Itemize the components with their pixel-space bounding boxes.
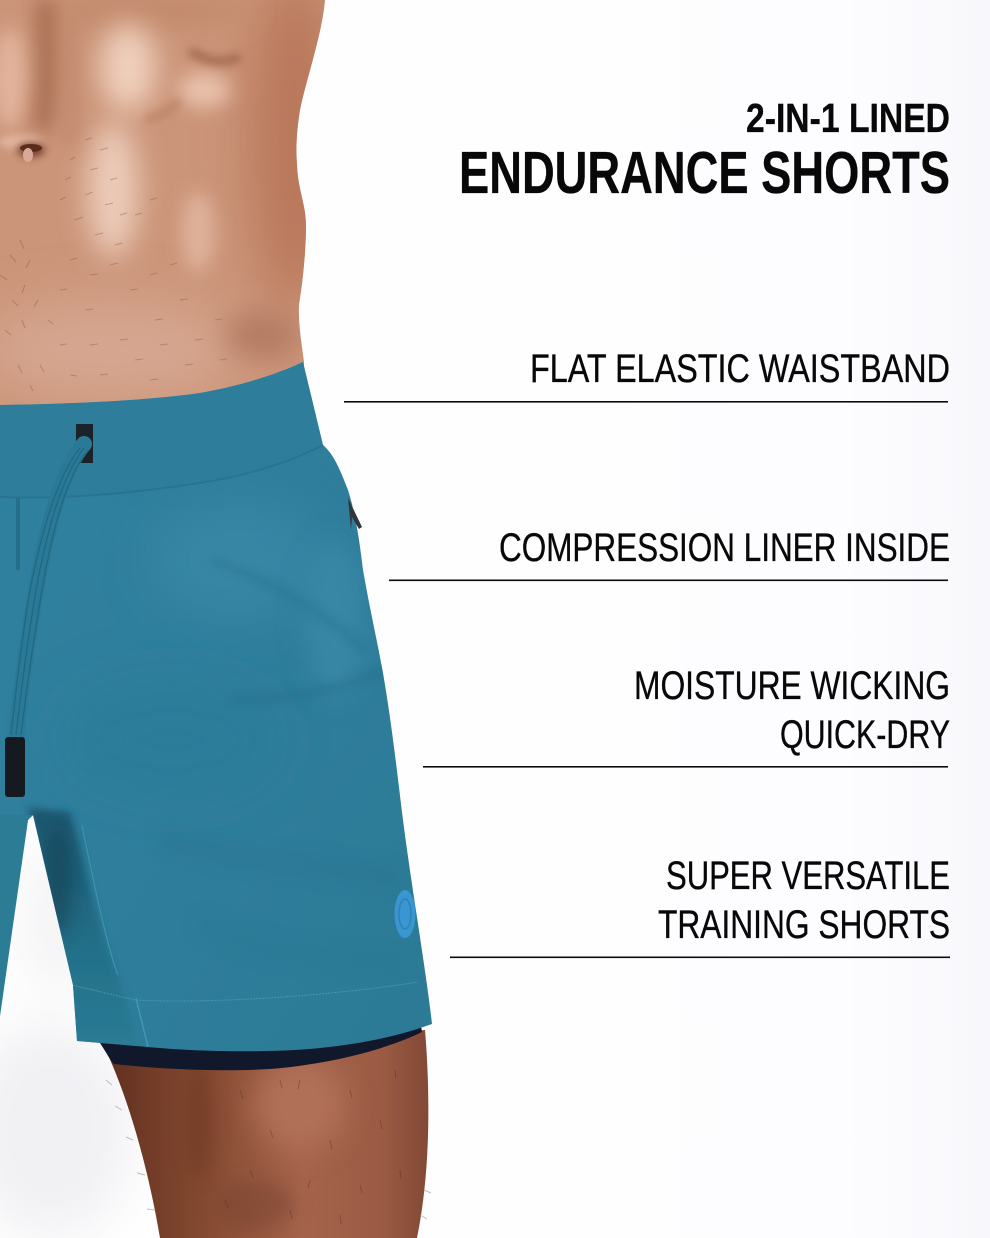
logo badge xyxy=(394,890,416,938)
abdominal creases xyxy=(190,50,240,61)
feature: moisture wicking quick-dry xyxy=(423,664,950,768)
drawstring tip xyxy=(5,737,25,797)
fabric light and folds xyxy=(200,544,280,575)
hem stitching xyxy=(72,982,418,1001)
title: 2-IN-1 LINED xyxy=(746,95,950,141)
photo: model torso xyxy=(0,0,340,425)
inner leg shadow panel xyxy=(28,808,140,1050)
waistband eyelet xyxy=(76,424,93,463)
compression liner xyxy=(100,1020,422,1070)
photo: model thigh xyxy=(100,1030,435,1238)
navel xyxy=(0,135,45,162)
title xyxy=(459,95,950,206)
body hair xyxy=(0,138,227,391)
drawstring xyxy=(16,444,84,738)
side zip pocket xyxy=(348,498,362,530)
waistband xyxy=(6,362,323,445)
skin tone zones xyxy=(250,0,340,310)
feature: super versatile training shorts xyxy=(450,854,950,958)
leg hair silhouette xyxy=(106,1080,431,1219)
leg hair xyxy=(225,1070,401,1224)
abdominal highlights xyxy=(100,24,156,112)
fly seam xyxy=(16,498,20,570)
photo: teal shorts xyxy=(0,355,440,1055)
left leg xyxy=(0,815,33,1016)
